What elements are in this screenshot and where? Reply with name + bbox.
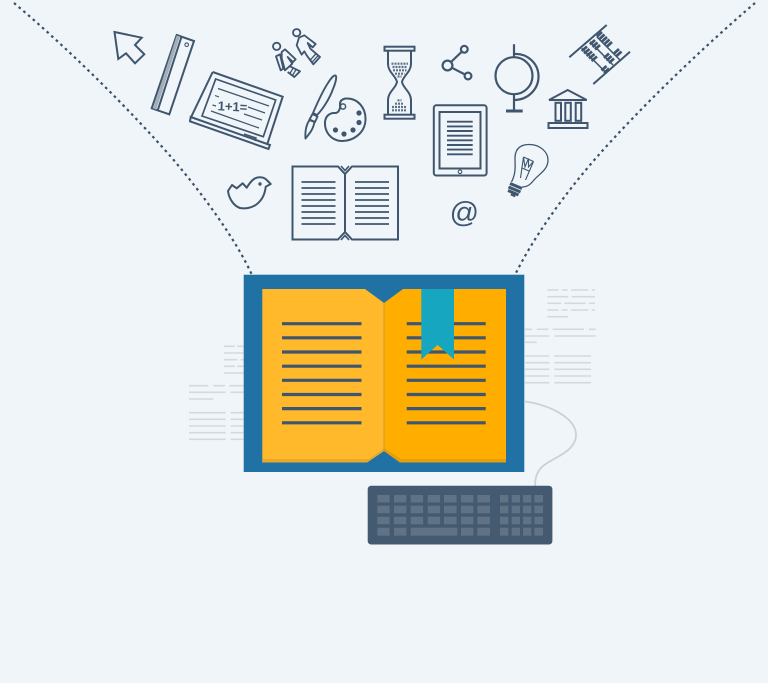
ghost text: right lower block xyxy=(525,356,591,383)
keyboard cable xyxy=(525,402,576,486)
keyboard xyxy=(368,486,552,544)
icon: bank building xyxy=(548,90,588,128)
icon: at sign: @ xyxy=(450,197,479,229)
icon: globe xyxy=(496,44,539,111)
ghost text: left lower block xyxy=(189,413,244,439)
ghost text: right upper block xyxy=(547,290,595,317)
icon: cursor arrow xyxy=(114,32,144,63)
page spine xyxy=(383,303,385,451)
icon: open book outline xyxy=(292,166,398,240)
icon: ruler xyxy=(152,35,194,114)
icon: abacus xyxy=(569,25,630,84)
icon: tablet xyxy=(434,105,487,176)
right page xyxy=(384,289,506,462)
left page text lines xyxy=(282,324,362,423)
icon: paint brush xyxy=(305,75,336,138)
dotted funnel line: right xyxy=(515,3,755,275)
keyboard keys xyxy=(377,495,543,536)
icon: palette xyxy=(325,98,366,141)
panel: blue screen xyxy=(244,275,524,472)
icon: chalkboard xyxy=(190,72,283,149)
icon: hourglass xyxy=(384,47,414,119)
ghost text: left upper block xyxy=(224,346,244,373)
right page text lines xyxy=(407,324,486,423)
ghost text: right middle block xyxy=(525,329,596,342)
icon: light bulb xyxy=(508,144,548,196)
left page xyxy=(262,289,384,462)
bookmark xyxy=(421,289,454,360)
icon: bird xyxy=(228,177,271,208)
ghost text: left middle block xyxy=(189,386,244,399)
chalkboard equation: 1+1= xyxy=(217,98,248,115)
icon: share xyxy=(443,46,471,79)
dotted funnel line: left xyxy=(14,3,252,275)
icon: two people xyxy=(273,29,320,77)
